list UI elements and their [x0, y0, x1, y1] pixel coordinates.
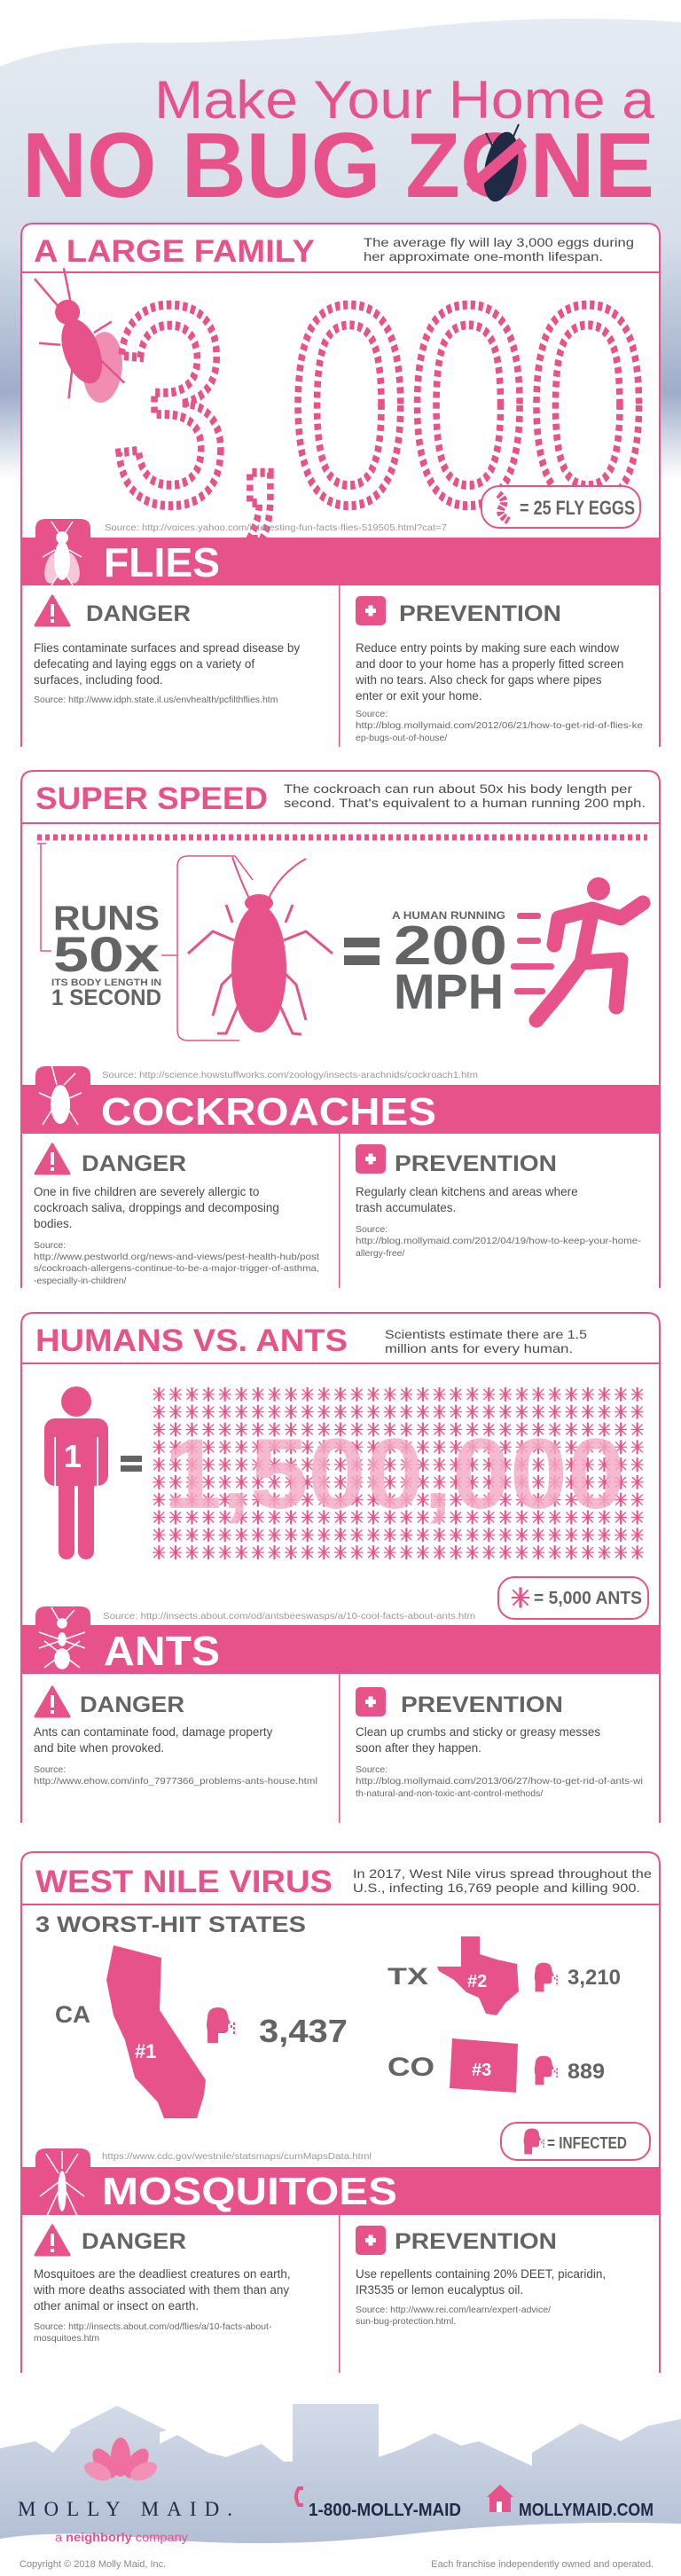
- equals sign: [121, 1456, 142, 1472]
- column: danger cockroaches: cockroach saliva, droppings and decomposing: [34, 1201, 279, 1214]
- legend: 25 fly eggs: = 25 FLY EGGS: [520, 497, 635, 519]
- panel: west nile virus: [21, 1852, 660, 2373]
- disclaimer: Each franchise independently owned and operated.: [431, 2559, 654, 2570]
- banner: flies: [21, 519, 660, 585]
- map: texas: #2: [467, 1972, 487, 1991]
- contact: website: [487, 2485, 654, 2520]
- legend: infected: = INFECTED: [547, 2134, 627, 2152]
- stat: runs 50x: [51, 899, 161, 1010]
- icon: white ant: [39, 1607, 85, 1669]
- column: prevention ants: Clean up crumbs and sticky or greasy messes: [356, 1725, 600, 1739]
- column: danger cockroaches: bodies.: [34, 1217, 73, 1230]
- text: west nile fact: In 2017, West Nile virus spread throughout the: [353, 1866, 652, 1881]
- text: ants fact: Scientists estimate there are 1.5: [385, 1327, 587, 1341]
- stat: 200 mph: [392, 909, 507, 1019]
- column: danger ants: DANGER: [80, 1692, 184, 1717]
- icon: white mosquito: [40, 2151, 84, 2218]
- text: fly eggs fact: The average fly will lay 3,000 eggs during: [364, 235, 634, 249]
- banner: cockroaches: [21, 1064, 660, 1134]
- column: danger flies: Source: http://www.idph.state.il.us/envhealth/pcfilthflies.htm: [34, 695, 278, 705]
- banner: ants: [21, 1606, 660, 1674]
- dotted track line: [37, 834, 647, 841]
- panel: super speed: [21, 771, 660, 1288]
- panel: humans vs ants: [21, 1313, 660, 1823]
- column: prevention ants: Source:: [356, 1764, 387, 1775]
- text: cockroach speed fact: second. That's equivalent to a human running 200 mph.: [284, 796, 646, 810]
- title: [22, 70, 655, 217]
- legend: infected: [501, 2123, 650, 2160]
- logo: molly maid: a neighborly company: [55, 2530, 188, 2544]
- map: texas: 3,210: [568, 1966, 621, 1990]
- footer skyline: [0, 2404, 681, 2543]
- icon: white fly: [42, 522, 82, 585]
- title: Make Your Home a: [154, 70, 655, 130]
- text: ants fact: [385, 1327, 587, 1355]
- map: texas: [387, 1936, 621, 2015]
- map: colorado: CO: [387, 2053, 434, 2082]
- column: prevention ants: [356, 1687, 643, 1799]
- column: danger cockroaches: One in five children are severely allergic to: [34, 1185, 259, 1198]
- column: danger cockroaches: [34, 1144, 319, 1286]
- column: prevention ants: th-natural-and-non-toxic-ant-control-methods/: [356, 1788, 543, 1799]
- icon: pink fly: [18, 256, 147, 423]
- column: prevention cockroaches: allergy-free/: [356, 1248, 405, 1259]
- heading: west nile virus: WEST NILE VIRUS: [35, 1865, 333, 1899]
- column: prevention ants: PREVENTION: [401, 1692, 563, 1717]
- banner: mosquitoes: [21, 2148, 660, 2218]
- banner: ants: ANTS: [104, 1628, 220, 1674]
- column: danger ants: http://www.ehow.com/info_7977366_problems-ants-house.html: [34, 1776, 317, 1787]
- map: colorado: [387, 2038, 605, 2093]
- text: west nile fact: U.S., infecting 16,769 people and killing 900.: [353, 1881, 640, 1895]
- icon: pink cockroach: [188, 857, 333, 1034]
- bracket lines: [37, 844, 253, 1041]
- text: west nile fact: [353, 1866, 652, 1895]
- map: california: CA: [55, 2001, 90, 2028]
- contact: website: MOLLYMAID.COM: [519, 2501, 654, 2520]
- stat: runs 50x: 50x: [53, 926, 160, 982]
- column: danger ants: Source:: [34, 1764, 66, 1775]
- column: danger mosquitoes: DANGER: [82, 2229, 186, 2254]
- column: prevention flies: http://blog.mollymaid.com/2012/06/21/how-to-get-rid-of-flies-ke: [356, 720, 643, 731]
- column: danger mosquitoes: other animal or insect on earth.: [34, 2299, 199, 2313]
- icon: cockroach in O: [470, 124, 524, 205]
- column: danger flies: Flies contaminate surfaces and spread disease by: [34, 641, 300, 655]
- column: prevention flies: PREVENTION: [399, 601, 561, 626]
- icon: lotus: [82, 2438, 160, 2485]
- stat: runs 50x: 1 SECOND: [51, 986, 161, 1010]
- source: ants: Source: http://insects.about.com/od/antsbeeswasps/a/10-cool-facts-about-ants.htm: [103, 1611, 475, 1622]
- text: fly eggs fact: her approximate one-month lifespan.: [364, 249, 603, 263]
- column: prevention mosquitoes: PREVENTION: [395, 2229, 557, 2254]
- column: prevention flies: ep-bugs-out-of-house/: [356, 733, 447, 743]
- legend: 5,000 ants: = 5,000 ANTS: [534, 1589, 642, 1608]
- text: ants fact: million ants for every human.: [385, 1341, 573, 1355]
- map: texas: TX: [387, 1963, 428, 1990]
- column: prevention flies: with no tears. Also check for gaps where pipes: [355, 673, 602, 687]
- stat: 200 mph: MPH: [394, 963, 504, 1019]
- banner: cockroaches: COCKROACHES: [101, 1090, 436, 1134]
- column: danger mosquitoes: Mosquitoes are the deadliest creatures on earth,: [34, 2267, 291, 2281]
- map: colorado: 889: [568, 2060, 605, 2084]
- legend: 5,000 ants: [498, 1577, 648, 1619]
- column: danger ants: and bite when provoked.: [34, 1741, 164, 1755]
- icon: white cockroach: [39, 1064, 82, 1125]
- column: prevention flies: Reduce entry points by making sure each window: [356, 641, 619, 655]
- column: prevention cockroaches: [356, 1144, 642, 1259]
- logo: molly maid: MOLLY MAID.: [18, 2498, 232, 2520]
- column: prevention ants: http://blog.mollymaid.com/2013/06/27/how-to-get-rid-of-ants-wi: [356, 1776, 643, 1787]
- column: danger mosquitoes: Source: http://insects.about.com/od/flies/a/10-facts-about-: [34, 2321, 272, 2332]
- column: danger ants: [34, 1687, 317, 1787]
- stat: runs 50x: RUNS: [53, 899, 160, 938]
- contact: phone: [294, 2486, 461, 2520]
- column: danger mosquitoes: with more deaths associated with them than any: [33, 2283, 289, 2297]
- heading: a large family: A LARGE FAMILY: [34, 234, 315, 269]
- column: danger cockroaches: -especially-in-children/: [34, 1276, 127, 1286]
- subheading: 3 worst-hit states: 3 WORST-HIT STATES: [35, 1912, 306, 1937]
- chart: ant grid 1,500,000: [151, 1386, 646, 1561]
- column: prevention mosquitoes: sun-bug-protection.html.: [356, 2316, 456, 2327]
- column: danger mosquitoes: mosquitoes.htm: [34, 2333, 99, 2344]
- chart: ant grid 1,500,000: 1,500,000: [164, 1418, 625, 1529]
- text: cockroach speed fact: [284, 781, 646, 810]
- panel: a large family: [18, 224, 660, 747]
- source: cockroach: Source: http://science.howstuffworks.com/zoology/insects-arachnids/cockroach1.htm: [102, 1070, 478, 1080]
- legend: 25 fly eggs: [481, 486, 640, 528]
- banner: mosquitoes: MOSQUITOES: [102, 2170, 397, 2213]
- heading: super speed: SUPER SPEED: [35, 781, 268, 816]
- header background: [0, 0, 681, 479]
- column: danger flies: surfaces, including food.: [34, 673, 163, 687]
- stat: runs 50x: ITS BODY LENGTH IN: [51, 978, 161, 988]
- column: prevention mosquitoes: Use repellents containing 20% DEET, picaridin,: [356, 2267, 606, 2281]
- column: danger cockroaches: http://www.pestworld.org/news-and-views/pest-health-hub/post: [34, 1252, 319, 1262]
- text: cockroach speed fact: The cockroach can run about 50x his body length per: [284, 781, 632, 796]
- contact: phone: 1-800-MOLLY-MAID: [309, 2501, 461, 2520]
- column: danger mosquitoes: [33, 2226, 291, 2344]
- column: prevention cockroaches: trash accumulates.: [356, 1201, 456, 1214]
- map: colorado: #3: [472, 2061, 491, 2080]
- column: prevention mosquitoes: IR3535 or lemon eucalyptus oil.: [356, 2283, 523, 2297]
- equals sign: [344, 938, 380, 965]
- column: danger flies: defecating and laying eggs on a variety of: [34, 657, 254, 671]
- map: california: #1: [135, 2040, 156, 2062]
- column: danger cockroaches: Source:: [34, 1240, 66, 1251]
- icon: runner with speed lines: [511, 877, 643, 1020]
- map: california: [55, 1945, 348, 2118]
- stat: 200 mph: 200: [394, 915, 507, 977]
- column: prevention mosquitoes: [356, 2226, 606, 2327]
- column: prevention ants: soon after they happen.: [356, 1741, 481, 1755]
- icon: human figure: 1: [64, 1438, 82, 1474]
- column: danger ants: Ants can contaminate food, damage property: [34, 1725, 273, 1739]
- text: fly eggs fact: [364, 235, 634, 263]
- logo: molly maid: [18, 2438, 232, 2544]
- stat: 200 mph: A HUMAN RUNNING: [392, 909, 505, 922]
- column: danger cockroaches: s/cockroach-allergens-continue-to-be-a-major-trigger-of-asthma,: [34, 1263, 319, 1274]
- column: prevention flies: Source:: [356, 709, 387, 719]
- column: prevention mosquitoes: Source: http://www.rei.com/learn/expert-advice/: [356, 2305, 551, 2315]
- column: prevention cockroaches: PREVENTION: [395, 1151, 557, 1176]
- column: prevention cockroaches: Source:: [356, 1224, 387, 1235]
- banner: flies: FLIES: [104, 539, 220, 585]
- copyright: Copyright © 2018 Molly Maid, Inc.: [20, 2559, 166, 2570]
- heading: humans vs ants: HUMANS VS. ANTS: [35, 1323, 348, 1358]
- column: prevention flies: and door to your home has a properly fitted screen: [356, 657, 623, 671]
- column: danger flies: [34, 596, 300, 705]
- map: california: 3,437: [259, 2013, 348, 2049]
- column: prevention cockroaches: http://blog.mollymaid.com/2012/04/19/how-to-keep-your-home-: [356, 1236, 642, 1246]
- title: NO BUG ZONE: [22, 114, 654, 217]
- source: west nile: https://www.cdc.gov/westnile/statsmaps/cumMapsData.html: [102, 2151, 372, 2162]
- icon: human figure: [44, 1386, 108, 1559]
- column: danger cockroaches: DANGER: [82, 1151, 186, 1176]
- column: prevention flies: enter or exit your home.: [356, 689, 482, 703]
- column: danger flies: DANGER: [86, 601, 191, 626]
- column: prevention cockroaches: Regularly clean kitchens and areas where: [356, 1185, 578, 1198]
- column: prevention flies: [355, 596, 643, 743]
- source: flies: Source: http://voices.yahoo.com/interesting-fun-facts-flies-519505.html?cat=7: [105, 522, 447, 533]
